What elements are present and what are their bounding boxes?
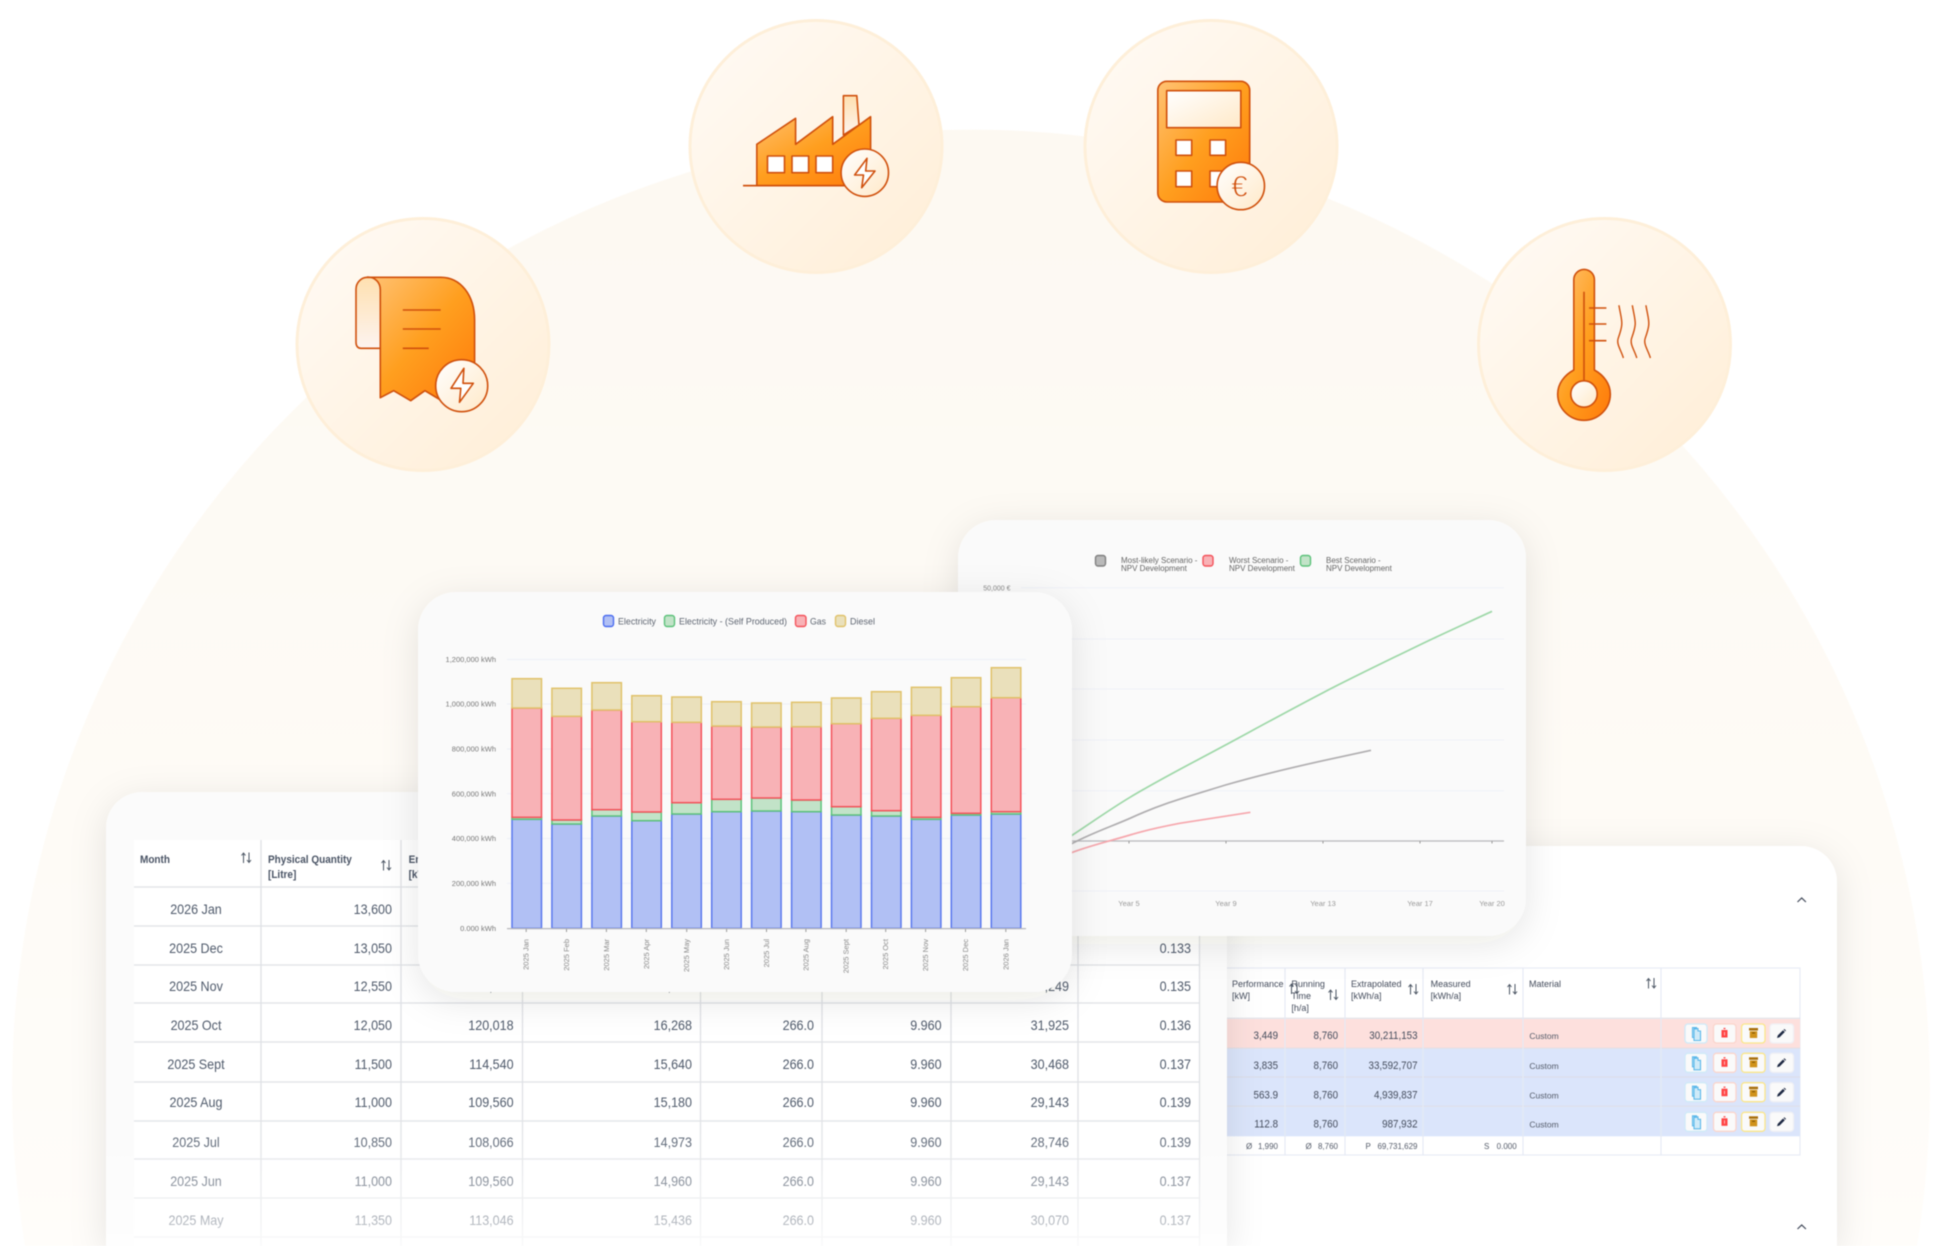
table data values: 3,835 (1254, 1061, 1278, 1072)
table body rows: 14,973 (654, 1135, 692, 1150)
table body rows: 113,046 (469, 1213, 514, 1228)
table body rows: 9.960 (910, 941, 942, 956)
table header labels: Time (1291, 991, 1311, 1001)
x axis month labels: 2025 Mar (602, 939, 611, 971)
table header: Physical Quantity (268, 854, 352, 866)
table data values: Custom (1529, 1061, 1559, 1071)
table body rows: 266.0 (783, 1135, 814, 1150)
x axis month labels: 2025 Dec (961, 939, 970, 971)
chart legend: Diesel (850, 616, 875, 627)
table header labels: Extrapolated (1351, 979, 1402, 989)
table data values: Custom (1529, 1090, 1559, 1100)
table header labels: Measured (1431, 979, 1471, 989)
icon circle: energy bill receipt (297, 218, 549, 470)
panel: stacked energy bar chart (418, 592, 1072, 992)
x axis month labels: 2025 Jul (762, 939, 771, 967)
bar: 2025 Aug (792, 702, 821, 928)
table header labels: [kW] (1232, 991, 1250, 1001)
chart legend: NPV Development (1229, 564, 1296, 573)
bar: 2025 Feb (552, 688, 581, 928)
table header (140, 852, 443, 881)
table summary row: 1,990 (1258, 1142, 1279, 1151)
bar: 2025 Oct (872, 692, 901, 928)
table body rows: 10,850 (354, 1135, 392, 1150)
table body rows: 108,066 (468, 1135, 514, 1150)
y axis label: 50,000 € (983, 585, 1011, 592)
x axis labels (1118, 899, 1505, 908)
chart legend: NPV Development (1121, 564, 1188, 573)
table body rows: 2025 May (168, 1213, 224, 1228)
x axis labels: Year 5 (1118, 899, 1140, 908)
table body rows: 12,550 (354, 979, 392, 994)
table data values: 8,760 (1314, 1119, 1338, 1131)
table body rows: 29,143 (1031, 1174, 1069, 1189)
table body rows: 31,925 (1031, 1018, 1069, 1033)
table header labels: [kWh/a] (1351, 991, 1382, 1001)
line: best scenario (1040, 611, 1492, 857)
table data values: 3,449 (1254, 1031, 1278, 1042)
table data values: 4,939,837 (1374, 1090, 1418, 1102)
line: most-likely scenario (1040, 750, 1371, 860)
table header labels: Material (1529, 979, 1561, 989)
table data values: 30,211,153 (1369, 1031, 1418, 1042)
icon: collapse chevron top (1798, 898, 1806, 902)
table data values: 112.8 (1254, 1119, 1278, 1131)
bar: 2025 Jun (712, 702, 741, 928)
table data values: 33,592,707 (1369, 1061, 1418, 1072)
table summary row: 8,760 (1318, 1142, 1339, 1151)
chart legend: Worst Scenario - (1229, 556, 1289, 565)
table header labels: [kWh/a] (1431, 991, 1461, 1001)
chart legend: Electricity - (Self Produced) (679, 616, 787, 627)
y axis labels: 0.000 kWh (460, 924, 496, 933)
bar: 2025 Sept (832, 698, 861, 928)
bar: 2025 May (672, 697, 701, 928)
table data values: 563.9 (1254, 1090, 1278, 1102)
table body rows: 0.137 (1160, 1057, 1191, 1072)
table body rows: 17,618 (654, 941, 692, 956)
action buttons (1685, 1024, 1794, 1131)
table body rows: 0.132 (1160, 902, 1191, 917)
bar: 2025 Jul (752, 703, 781, 928)
table body rows: 124,998 (468, 979, 514, 994)
x axis month labels: 2025 Jan (522, 939, 531, 970)
table body rows: 9.960 (910, 1057, 942, 1072)
line: worst scenario (1040, 812, 1250, 866)
bar: 2025 Dec (951, 678, 981, 928)
table body rows: 2025 Aug (170, 1095, 222, 1110)
x axis month labels: 2025 Feb (562, 939, 571, 971)
x axis month labels: 2025 May (682, 939, 691, 972)
x axis labels: Year 13 (1310, 899, 1336, 908)
table body rows: 266.0 (783, 1174, 814, 1189)
table data values: Custom (1529, 1120, 1559, 1130)
table body rows: 28,746 (1031, 1135, 1069, 1150)
table body rows: 11,000 (355, 1174, 392, 1189)
y axis labels: 800,000 kWh (452, 745, 496, 754)
table summary row: P (1366, 1142, 1371, 1151)
table body rows: 266.0 (783, 979, 814, 994)
table header labels: [h/a] (1291, 1003, 1309, 1013)
x axis month labels: 2025 Jun (722, 939, 731, 970)
table body rows: 36,031 (1031, 902, 1069, 917)
x axis month labels: 2025 Sept (842, 938, 851, 973)
table summary row: Ø (1246, 1142, 1252, 1151)
chart legend: Gas (810, 616, 826, 627)
table header: Energy (409, 854, 443, 866)
panel: monthly consumption table (left) (106, 792, 1227, 1246)
table data values: 8,760 (1314, 1061, 1338, 1072)
x axis month labels (522, 938, 1010, 973)
table header labels: Performance (1232, 979, 1284, 989)
table body rows: 0.137 (1160, 1213, 1191, 1228)
chart legend: NPV Development (1326, 564, 1393, 573)
x axis month labels: 2026 Jan (1001, 939, 1010, 970)
table body rows: 2025 Nov (169, 979, 223, 994)
table body rows: 0.133 (1160, 941, 1191, 956)
table body rows: 9.960 (910, 1174, 942, 1189)
table body rows: 2025 Jun (170, 1174, 222, 1189)
table body rows: 0.139 (1160, 1135, 1191, 1150)
table body rows: 0.135 (1160, 979, 1191, 994)
table body rows: 11,500 (355, 1057, 392, 1072)
table body rows: 0.136 (1160, 1018, 1191, 1033)
x axis month labels: 2025 Apr (642, 939, 651, 969)
y axis labels: 1,000,000 kWh (446, 700, 496, 709)
table body rows: 266.0 (783, 941, 814, 956)
table body rows: 2025 Sept (167, 1057, 225, 1072)
table body rows: 266.0 (783, 1018, 814, 1033)
x axis month labels: 2025 Oct (881, 938, 890, 969)
icon: receipt with lightning bolt (356, 277, 488, 412)
bar: 2025 Apr (632, 696, 661, 928)
x axis labels: Year 17 (1407, 899, 1433, 908)
table body rows: 9.960 (910, 1213, 942, 1228)
bar: 2026 Jan (991, 668, 1021, 928)
x axis month labels: 2025 Aug (801, 939, 810, 971)
y axis labels: 600,000 kWh (452, 789, 496, 798)
table body rows: 109,560 (468, 1095, 514, 1110)
table body rows: 9.960 (910, 1135, 942, 1150)
chart legend (604, 616, 875, 627)
table body rows: 34,574 (1031, 941, 1069, 956)
x axis month labels: 2025 Nov (921, 939, 930, 971)
icon: calculator with euro badge: € (1231, 170, 1248, 204)
icon circle: calculator with euro (1085, 20, 1337, 272)
table body rows: 9.960 (910, 1018, 942, 1033)
icon: thermometer with heat waves (1558, 269, 1650, 420)
table body rows: 15,640 (654, 1057, 692, 1072)
icon circle: thermometer with heat (1478, 218, 1730, 470)
x axis labels: Year 9 (1215, 899, 1237, 908)
table body rows: 12,050 (354, 1018, 392, 1033)
table header labels (1232, 978, 1656, 1013)
table body rows: 16,268 (654, 1018, 692, 1033)
table data values (1254, 1031, 1559, 1131)
table header: [Litre] (268, 869, 296, 881)
chart legend: Best Scenario - (1326, 556, 1381, 565)
table body rows: 33,249 (1031, 979, 1069, 994)
table summary row: S (1484, 1142, 1489, 1151)
table body rows (167, 902, 1191, 1228)
table summary row: Ø (1306, 1142, 1312, 1151)
table body rows: 129,978 (468, 941, 514, 956)
panel: NPV scenario line chart (958, 520, 1526, 936)
table body rows: 11,350 (355, 1213, 392, 1228)
icon: collapse chevron bottom (1798, 1225, 1806, 1229)
y axis labels: 200,000 kWh (452, 879, 496, 888)
icon: calculator with euro badge (1158, 81, 1265, 210)
table body rows: 2025 Dec (169, 941, 223, 956)
table header: [kWh] (409, 869, 436, 881)
table body rows: 135,456 (468, 902, 514, 917)
table body rows: 30,070 (1031, 1213, 1069, 1228)
y axis labels: 1,200,000 kWh (446, 655, 496, 664)
table body rows: 13,050 (354, 941, 392, 956)
table body rows: 120,018 (468, 1018, 514, 1033)
table header labels: Running (1291, 979, 1325, 989)
table summary row: 69,731,629 (1377, 1142, 1418, 1151)
chart legend: Most-likely Scenario - (1121, 556, 1198, 565)
table body rows: 11,000 (355, 1095, 392, 1110)
table body rows: 16,943 (654, 979, 692, 994)
table summary row: 0.000 (1497, 1142, 1517, 1151)
table body rows: 2025 Oct (171, 1018, 222, 1033)
table summary row (1246, 1142, 1517, 1151)
table body rows: 266.0 (783, 1095, 814, 1110)
table body rows: 9.960 (910, 1095, 942, 1110)
table: energy system rows (1200, 968, 1800, 1155)
bar: 2025 Nov (911, 687, 941, 928)
table body rows: 2025 Jul (172, 1135, 220, 1150)
table body rows: 14,960 (654, 1174, 692, 1189)
table body rows: 29,143 (1031, 1095, 1069, 1110)
chart legend (1096, 556, 1393, 573)
table data values: 8,760 (1314, 1090, 1338, 1102)
table body rows: 9.960 (910, 902, 942, 917)
table body rows: 18,360 (654, 902, 692, 917)
table body rows: 13,600 (354, 902, 392, 917)
table body rows: 30,468 (1031, 1057, 1069, 1072)
y axis labels (446, 655, 496, 933)
table body rows: 266.0 (783, 1213, 814, 1228)
chart legend: Electricity (618, 616, 656, 627)
panel: energy system table (right) (1100, 846, 1837, 1246)
table header: Month (140, 854, 170, 866)
icon: factory with lightning bolt (743, 96, 888, 196)
table body rows: 15,436 (654, 1213, 692, 1228)
icon circle: factory with electricity (690, 20, 942, 272)
table body rows: 2026 Jan (170, 902, 222, 917)
table body rows: 0.137 (1160, 1174, 1191, 1189)
table body rows: 15,180 (654, 1095, 692, 1110)
y axis labels: 400,000 kWh (452, 834, 496, 843)
table body rows: 266.0 (783, 902, 814, 917)
bar: 2025 Mar (592, 683, 621, 928)
bar: 2025 Jan (512, 679, 542, 928)
table body rows: 109,560 (468, 1174, 514, 1189)
table body rows: 114,540 (469, 1057, 514, 1072)
x axis labels: Year 20 (1479, 899, 1505, 908)
table body rows: 0.139 (1160, 1095, 1191, 1110)
table data values: Custom (1529, 1031, 1559, 1041)
table body rows: 9.960 (910, 979, 942, 994)
table body rows: 266.0 (783, 1057, 814, 1072)
table data values: 8,760 (1314, 1031, 1338, 1042)
table data values: 987,932 (1382, 1119, 1418, 1131)
